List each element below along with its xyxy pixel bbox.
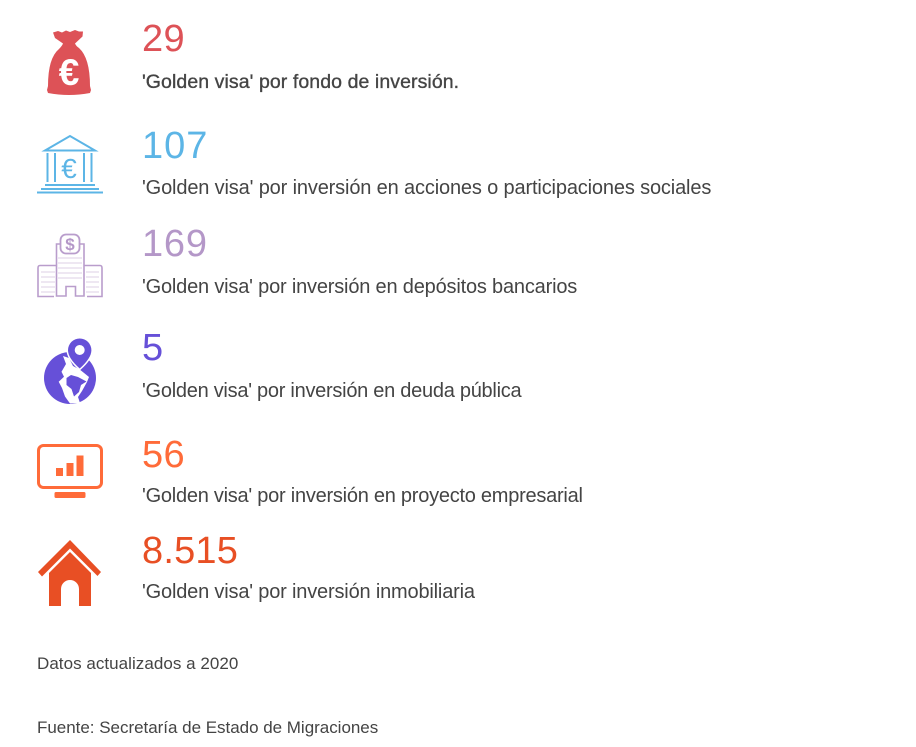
icon: house [38,540,101,606]
item 6 label: 'Golden visa' por inversión inmobiliaria [142,581,475,603]
item 6 number: 8.515 [142,530,238,572]
item 1 number: 29 [142,18,185,60]
icon: monitor with bars [38,446,102,498]
update note: Datos actualizados a 2020 [37,654,238,673]
item 3 label: 'Golden visa' por inversión en depósitos bancarios [142,276,577,298]
icon: bank building with dollar [38,234,102,296]
item 1 label: 'Golden visa' por fondo de inversión. [142,71,459,93]
item 4 label: 'Golden visa' por inversión en deuda pública [142,380,521,402]
item 4 number: 5 [142,327,164,369]
icon: globe with pin [44,338,96,404]
icon: money bag [47,30,91,95]
source note: Fuente: Secretaría de Estado de Migraciones [37,718,378,737]
icon: bank: € [61,153,77,184]
item 2 number: 107 [142,125,208,167]
item 5 label: 'Golden visa' por inversión en proyecto empresarial [142,485,583,507]
icon: money bag: € [59,52,79,93]
icon: bank [37,136,103,192]
item 2 label: 'Golden visa' por inversión en acciones o participaciones sociales [142,177,711,199]
item 5 number: 56 [142,434,185,476]
icon: bank building with dollar: $ [65,235,75,254]
item 3 number: 169 [142,223,208,265]
